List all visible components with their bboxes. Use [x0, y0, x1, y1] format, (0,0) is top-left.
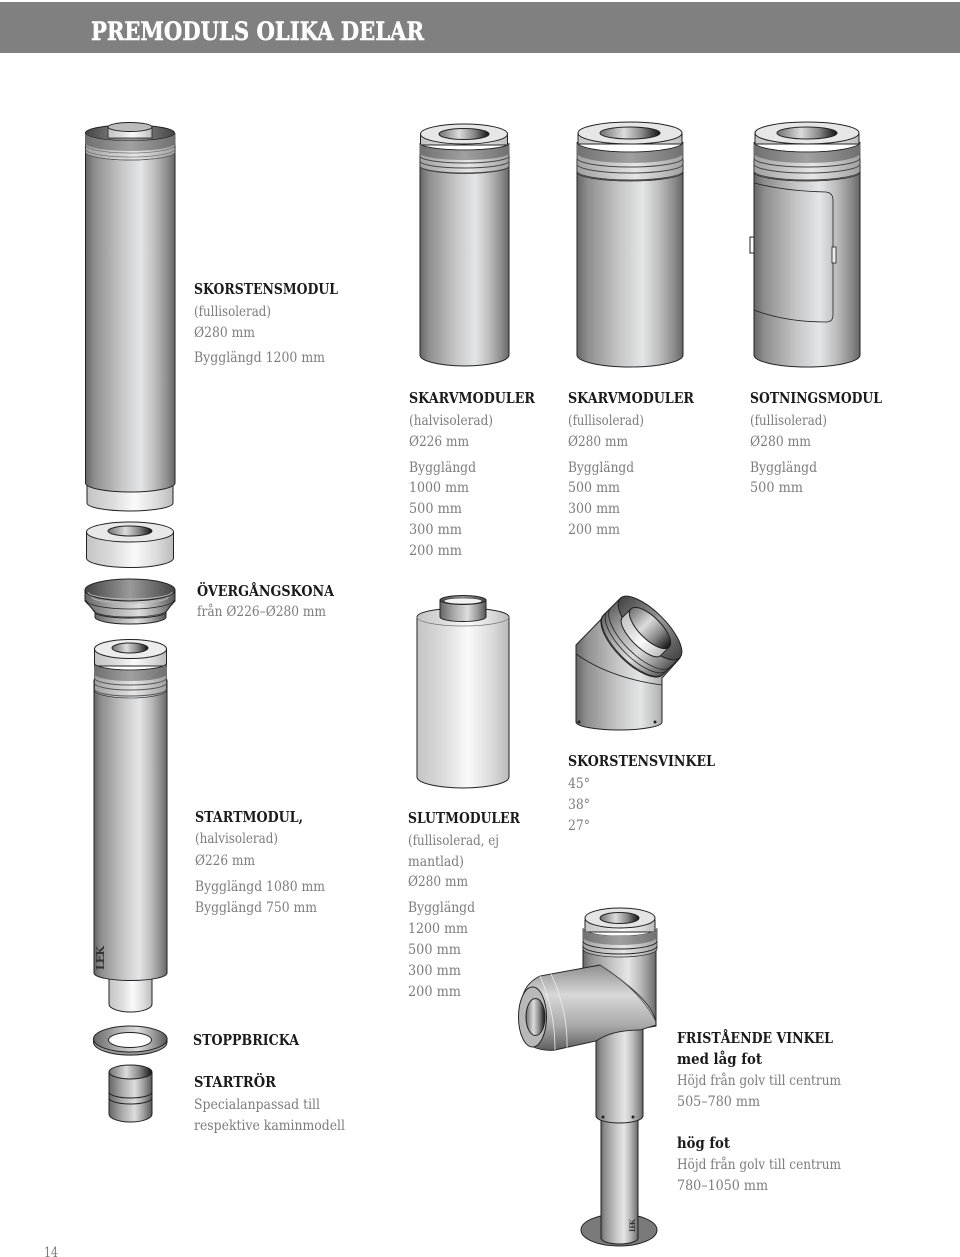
text: skarvmoduler halvisolerad: 1000 mm [409, 480, 469, 496]
text: skorstensmodul: (fullisolerad) [194, 304, 271, 320]
text: fristående vinkel: hög fot [677, 1135, 730, 1152]
text: sotningsmodul: SOTNINGSMODUL [750, 390, 882, 407]
text: skarvmoduler halvisolerad: Bygglängd [409, 460, 476, 476]
text: startrör [194, 1072, 345, 1134]
illustration: startmodul [94, 640, 167, 1012]
text: sotningsmodul [750, 390, 882, 496]
text: startmodul: (halvisolerad) [195, 831, 278, 847]
text: slutmoduler: 300 mm [408, 963, 461, 979]
illustration: startrör [109, 1065, 152, 1122]
text: stoppbricka: STOPPBRICKA [193, 1032, 300, 1049]
illustration: övergångskona [85, 579, 175, 624]
text: skarvmoduler halvisolerad: SKARVMODULER [409, 390, 536, 407]
illustration: skarvmodul fullisolerad [577, 122, 683, 367]
text: skarvmoduler halvisolerad: 200 mm [409, 543, 462, 559]
text: startmodul: STARTMODUL, [195, 809, 303, 826]
text: fristående vinkel: med låg fot [677, 1050, 762, 1068]
text: sotningsmodul: (fullisolerad) [750, 413, 827, 429]
illustration: fristående vinkel: LEK [628, 1218, 637, 1232]
text: skorstensvinkel: 38° [568, 797, 590, 813]
text: slutmoduler: Bygglängd [408, 900, 475, 916]
illustration: reducer ring [86, 522, 174, 568]
text: skarvmoduler fullisolerad: 500 mm [568, 480, 620, 496]
text: fristående vinkel: 780–1050 mm [677, 1178, 768, 1194]
text: startmodul [195, 809, 325, 916]
text: startrör: STARTRÖR [194, 1072, 277, 1091]
text: skarvmoduler fullisolerad: (fullisolerad) [568, 413, 644, 429]
title: PREMODULS OLIKA DELAR [91, 17, 424, 46]
text: skarvmoduler fullisolerad: SKARVMODULER [568, 390, 695, 407]
text: slutmoduler: SLUTMODULER [408, 810, 521, 827]
illustration: skarvmodul halvisolerad [420, 124, 509, 366]
illustration: startmodul: LEK [94, 946, 107, 970]
text: sotningsmodul: Ø280 mm [750, 434, 811, 450]
text: skarvmoduler fullisolerad [568, 390, 695, 538]
text: skorstensvinkel: SKORSTENSVINKEL [568, 753, 715, 770]
text: skorstensmodul [194, 281, 338, 366]
illustration: skorstensmodul 1200 mm tube [86, 122, 175, 511]
text: fristående vinkel: Höjd från golv till centrum [677, 1072, 841, 1089]
text: skorstensvinkel: 27° [568, 818, 590, 834]
text: fristående vinkel: Höjd från golv till centrum [677, 1156, 841, 1173]
text: slutmoduler: (fullisolerad, ej [408, 833, 499, 849]
illustration: skorstensvinkel [576, 587, 691, 730]
text: skorstensvinkel: 45° [568, 776, 590, 792]
illustration: sotningsmodul [750, 122, 860, 367]
text: startrör: Specialanpassad till [194, 1097, 320, 1113]
text: skarvmoduler halvisolerad [409, 390, 536, 559]
text: skorstensmodul: Bygglängd 1200 mm [194, 350, 325, 366]
text: startmodul: Bygglängd 1080 mm [195, 879, 325, 895]
text: skarvmoduler halvisolerad: Ø226 mm [409, 434, 469, 450]
text: övergångskona: ÖVERGÅNGSKONA [197, 581, 335, 600]
text: startmodul: Ø226 mm [195, 853, 255, 869]
text: skarvmoduler fullisolerad: Ø280 mm [568, 434, 628, 450]
text: sotningsmodul: 500 mm [750, 480, 803, 496]
text: fristående vinkel: 505–780 mm [677, 1094, 760, 1110]
text: slutmoduler [408, 810, 521, 1000]
text: skarvmoduler halvisolerad: (halvisolerad) [409, 413, 493, 429]
text: skorstensmodul: SKORSTENSMODUL [194, 281, 338, 298]
text: slutmoduler: 1200 mm [408, 921, 468, 937]
text: skarvmoduler halvisolerad: 500 mm [409, 501, 462, 517]
text: skarvmoduler fullisolerad: 300 mm [568, 501, 620, 517]
text: fristående vinkel: FRISTÅENDE VINKEL [677, 1029, 833, 1047]
text: startrör: respektive kaminmodell [194, 1118, 345, 1134]
text: startmodul: Bygglängd 750 mm [195, 900, 317, 916]
text: skorstensmodul: Ø280 mm [194, 325, 255, 341]
text: skarvmoduler halvisolerad: 300 mm [409, 522, 462, 538]
text: skarvmoduler fullisolerad: Bygglängd [568, 460, 634, 476]
header band [0, 2, 960, 53]
illustration: fristående vinkel [518, 908, 657, 1246]
illustration: stoppbricka [94, 1026, 167, 1055]
text: slutmoduler: Ø280 mm [408, 874, 468, 890]
text: slutmoduler: 200 mm [408, 984, 461, 1000]
text: fristående vinkel [677, 1029, 841, 1194]
text: skarvmoduler fullisolerad: 200 mm [568, 522, 620, 538]
text: sotningsmodul: Bygglängd [750, 460, 817, 476]
text: övergångskona: från Ø226–Ø280 mm [197, 603, 326, 620]
text: övergångskona [197, 581, 335, 620]
text: slutmoduler: 500 mm [408, 942, 461, 958]
text: slutmoduler: mantlad) [408, 854, 464, 870]
text: skorstensvinkel [568, 753, 715, 834]
illustration: slutmodul [417, 596, 509, 788]
